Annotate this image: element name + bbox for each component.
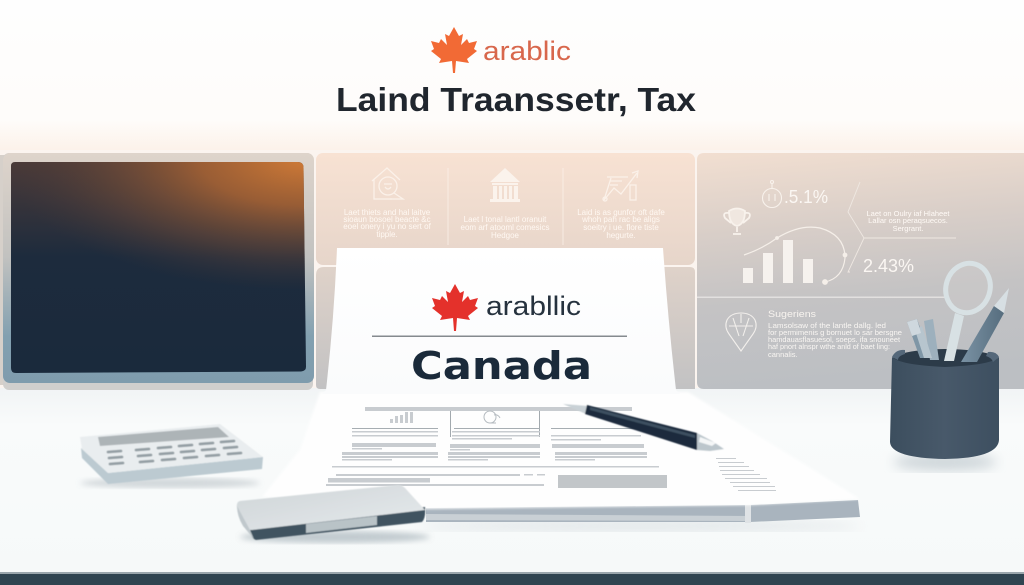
icon: eraser block bbox=[237, 485, 430, 543]
fact text 3: whoh pah rac be aligs bbox=[581, 215, 660, 224]
icon: calculator bbox=[80, 424, 263, 488]
icon: pencil cup with tools bbox=[890, 257, 1009, 471]
stat description: Sergrant. bbox=[893, 224, 923, 233]
fact text 3: hegurte. bbox=[606, 231, 636, 240]
paper wordmark: arabllic bbox=[486, 291, 581, 321]
Canada heading: Canada bbox=[411, 344, 592, 388]
fact text 1: sioaun bosoel beacte &c bbox=[343, 215, 431, 224]
magnifier bbox=[939, 257, 997, 361]
logo wordmark: arablic bbox=[483, 36, 571, 66]
monitor screen bbox=[11, 162, 306, 373]
paper sheet with logo bbox=[322, 248, 680, 394]
suggestions text: haf pnort alnspr wthe anld of baet ling: bbox=[768, 342, 890, 351]
suggestions text: cannalis. bbox=[768, 350, 798, 359]
panel: top middle three facts bbox=[316, 153, 695, 265]
bottom bar bbox=[0, 572, 1024, 585]
icon: bank building bbox=[490, 168, 520, 202]
calculator keys bbox=[108, 441, 241, 464]
pen in cup bbox=[961, 288, 1009, 362]
fact text 2: eom arf atooml comesics bbox=[461, 223, 549, 232]
suggestions text: hamdauasflasuesol, soeps. ifa snouneet bbox=[768, 335, 901, 344]
suggestions text: Lamsolsaw of the lantle dallg. led bbox=[768, 321, 886, 330]
suggestions text: for permimenis g bornuet lo sar bersgne bbox=[768, 328, 902, 337]
document table bbox=[326, 407, 776, 491]
panel: right statistics bbox=[697, 153, 1024, 389]
title: Laind Traanssetr, Tax bbox=[336, 81, 697, 118]
icon: map pin globe bbox=[726, 313, 756, 351]
icon: red maple leaf bbox=[432, 284, 478, 331]
document sheet bbox=[262, 392, 860, 509]
header logo bbox=[431, 27, 571, 73]
icon: orange maple leaf bbox=[431, 27, 477, 73]
icon: document lightbulb bbox=[484, 411, 500, 423]
stat description: Lallar osn peraqsuecos. bbox=[868, 216, 948, 225]
suggestions heading: Sugeriens bbox=[768, 309, 816, 320]
bar chart bbox=[743, 240, 813, 283]
calculator screen bbox=[98, 427, 229, 446]
fact text 1: eoel onery i yu no sert of bbox=[343, 222, 432, 231]
icon: house with magnifier bbox=[372, 168, 403, 199]
fact text 3: Laid is as gunfor oft dafe bbox=[577, 208, 665, 217]
stat description: Laet on Oulry iaf Hlaheet bbox=[867, 209, 950, 218]
panel: lower middle bbox=[316, 267, 695, 389]
fact text 3: soeitry i ue. flore tiste bbox=[583, 223, 659, 232]
trend curve bbox=[744, 227, 847, 284]
icon: trophy bbox=[724, 208, 750, 234]
icon: pen bbox=[563, 404, 724, 451]
fact text 1: Laet thiets and hal laitve bbox=[344, 208, 431, 217]
fact text 2: Hedgoe bbox=[491, 231, 520, 240]
stat: 5.1 percent: .5.1% bbox=[784, 187, 828, 207]
pencils bbox=[907, 319, 939, 360]
fact text 1: tipple. bbox=[376, 230, 398, 239]
fact text 2: Laet l tonal lantl oranuit bbox=[464, 215, 547, 224]
stat: 2.43 percent: 2.43% bbox=[863, 256, 914, 276]
panel: dark monitor bbox=[0, 153, 314, 390]
icon: stopwatch bbox=[762, 180, 782, 208]
document stack on desk bbox=[262, 392, 860, 531]
icon: chart with arrow bbox=[603, 171, 638, 201]
